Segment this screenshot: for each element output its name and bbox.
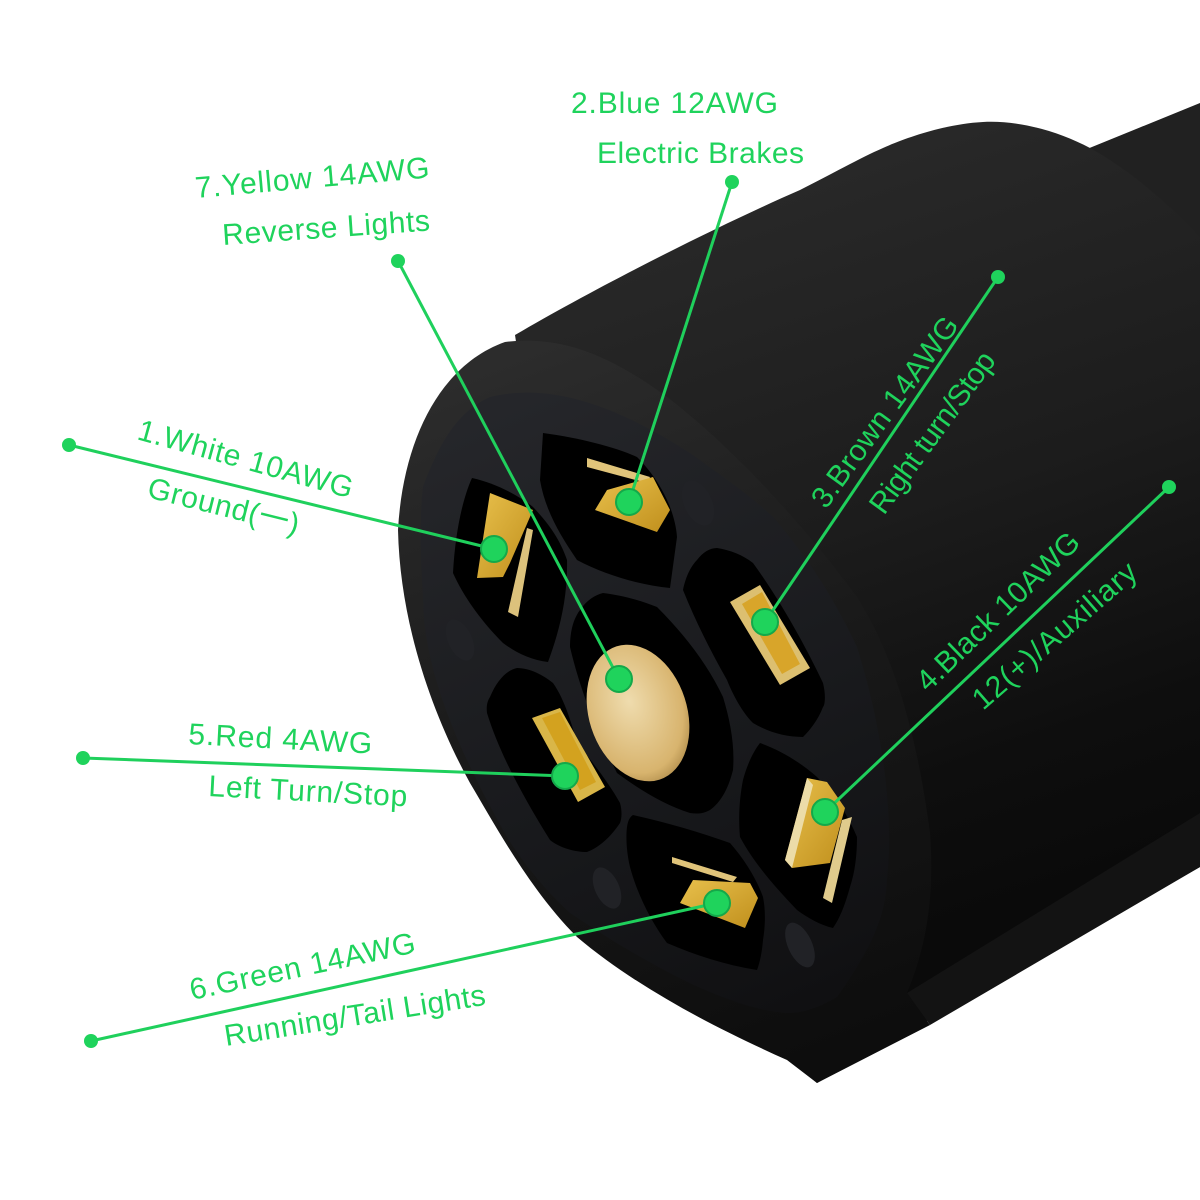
socket: lower right bbox=[739, 743, 857, 928]
terminal: lower left bbox=[532, 708, 605, 802]
callout: 1 White: Ground(一) bbox=[144, 472, 303, 541]
callout: 7 Yellow: 7.Yellow 14AWG bbox=[194, 152, 431, 205]
socket: bottom bbox=[626, 815, 765, 970]
terminal: lower right bbox=[785, 778, 852, 903]
callout: 6 Green: 6.Green 14AWG bbox=[187, 927, 418, 1007]
callout: 5 Red bbox=[76, 718, 578, 813]
callout: 5 Red: 5.Red 4AWG bbox=[188, 718, 373, 761]
callout: 4 Black bbox=[812, 480, 1176, 825]
callout: 6 Green bbox=[84, 890, 730, 1053]
terminal: centre pin bbox=[570, 631, 706, 795]
callout: 4 Black: 4.Black 10AWG bbox=[910, 526, 1087, 698]
socket: lower left bbox=[487, 668, 622, 852]
callout: 3 Brown: 3.Brown 14AWG bbox=[805, 310, 966, 514]
callout: 3 Brown bbox=[752, 270, 1005, 635]
plate bumps bbox=[440, 475, 821, 972]
terminal: upper right bbox=[730, 585, 810, 685]
callout: 7 Yellow: Reverse Lights bbox=[221, 205, 431, 252]
terminal: top bbox=[587, 458, 670, 532]
callout: 7 Yellow bbox=[194, 152, 632, 692]
callout: 4 Black: 12(+)/Auxiliary bbox=[966, 556, 1144, 716]
terminal: left bbox=[477, 493, 533, 617]
connector face bbox=[398, 341, 931, 1083]
callout: 1 White bbox=[62, 414, 507, 562]
callout: 5 Red: Left Turn/Stop bbox=[208, 770, 408, 813]
callout: 3 Brown: Right turn/Stop bbox=[863, 345, 1003, 520]
connector body bbox=[515, 103, 1200, 1083]
socket: left bbox=[453, 478, 567, 662]
terminal: bottom bbox=[672, 857, 758, 928]
callout: 6 Green: Running/Tail Lights bbox=[222, 979, 488, 1053]
callout: 2 Blue: Electric Brakes bbox=[597, 137, 804, 170]
socket: centre bbox=[570, 593, 733, 814]
callout: 2 Blue: 2.Blue 12AWG bbox=[571, 87, 778, 120]
socket: top bbox=[540, 433, 677, 588]
socket: upper right bbox=[683, 548, 825, 737]
callout: 2 Blue bbox=[571, 87, 804, 515]
callout: 1 White: 1.White 10AWG bbox=[134, 414, 357, 505]
